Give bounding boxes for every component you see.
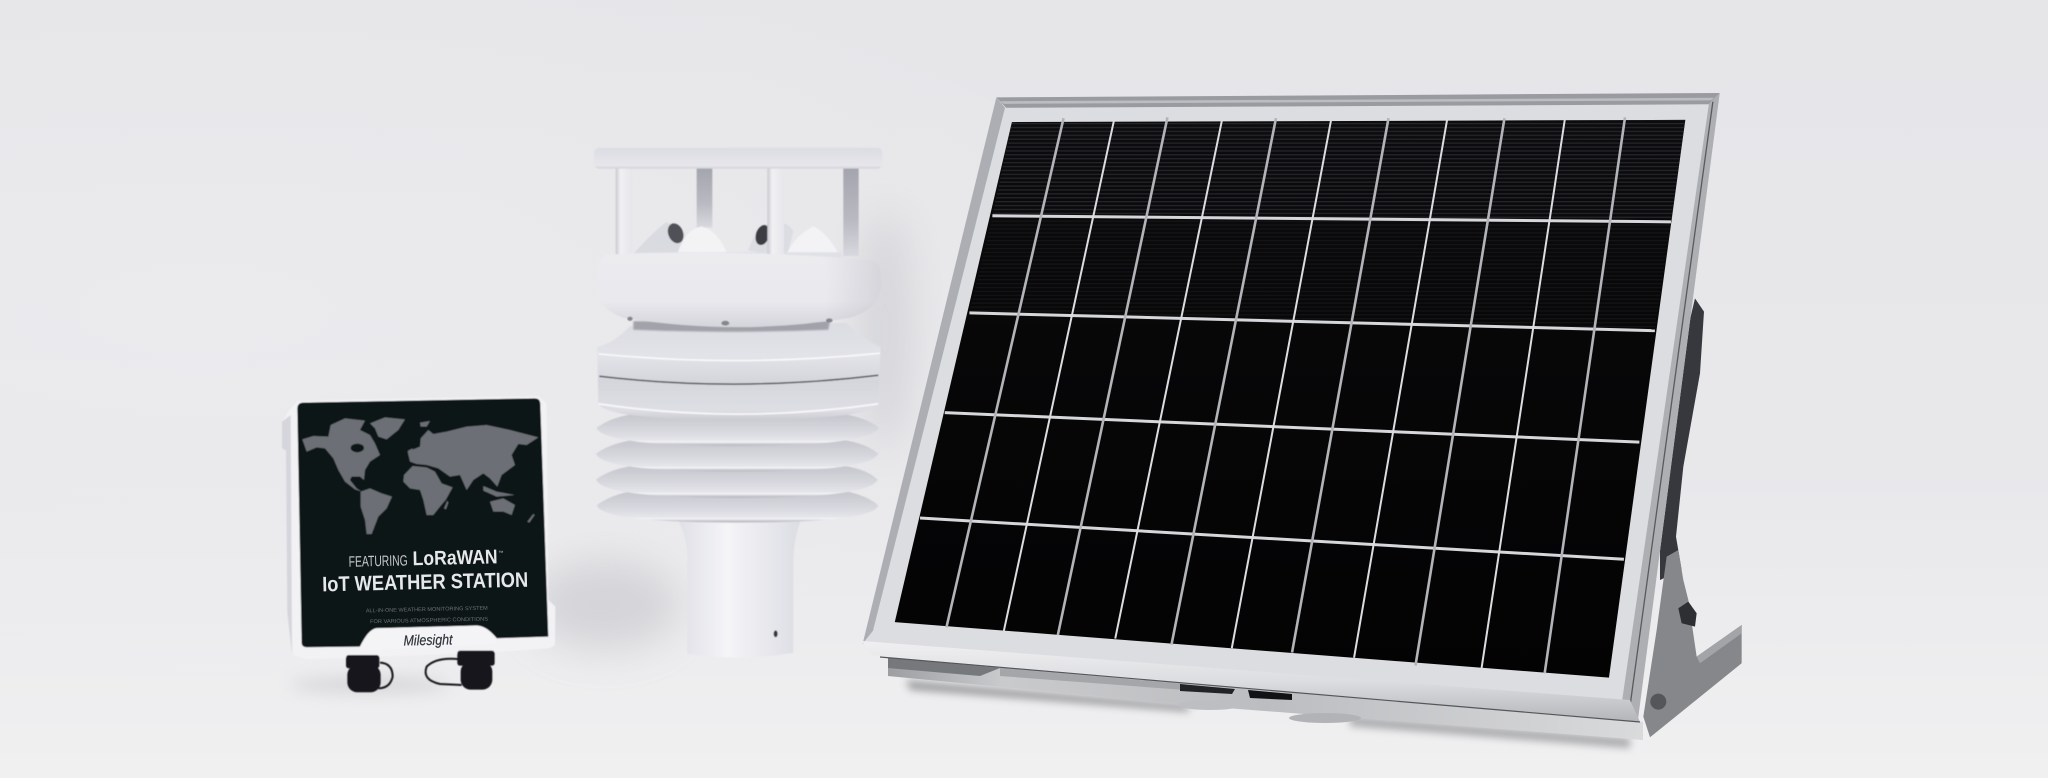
device text: ™ [498, 550, 504, 556]
device text [321, 546, 530, 651]
device left edge [282, 415, 292, 653]
busbars vertical grey [946, 117, 1625, 673]
shield neck shadow [633, 321, 830, 332]
bracket knob [1678, 602, 1697, 627]
hudson bay [351, 444, 364, 452]
product title: IoT WEATHER STATION [322, 569, 528, 596]
connector cap loops [378, 659, 462, 688]
stem hole [774, 630, 778, 637]
cell hatch [992, 120, 1685, 222]
tagline line 1: ALL-IN-ONE WEATHER MONITORING SYSTEM [366, 606, 488, 614]
solar panel assembly [862, 93, 1742, 740]
frame bottom shadow line [880, 657, 1640, 722]
ultrasonic weather sensor [594, 148, 882, 658]
sensor stem [678, 521, 801, 658]
rear dark support [1660, 298, 1704, 580]
front pillars [616, 167, 784, 259]
sensor probes [633, 221, 842, 259]
photovoltaic cells [895, 120, 1685, 678]
rear pillars [697, 167, 859, 256]
connectors [346, 651, 495, 692]
busbars horizontal [920, 216, 1671, 559]
device text: LoRaWAN [412, 546, 498, 570]
metal bracket plate [1643, 550, 1742, 737]
world map [302, 417, 538, 534]
busbars vertical white [1004, 120, 1565, 669]
device screen [297, 398, 548, 647]
second row hatch [969, 216, 1671, 331]
panel frame [863, 93, 1720, 722]
frame right edge [1622, 93, 1720, 722]
LoRaWAN heading: FEATURING [348, 552, 408, 571]
bottom rail [888, 658, 1643, 740]
radiation shield fins [596, 323, 881, 523]
logo: Milesight [403, 632, 453, 650]
logo tab [360, 626, 497, 651]
frame top edge [996, 93, 1720, 108]
bracket bolt [1650, 694, 1666, 710]
tagline line 2: FOR VARIOUS ATMOSPHERIC CONDITIONS [370, 617, 489, 625]
rear and side brackets [1643, 298, 1742, 737]
ring screws [627, 317, 833, 326]
frame bottom band [862, 641, 1640, 722]
weather station device [282, 396, 555, 692]
ring right shading [596, 253, 882, 327]
top cap [594, 148, 882, 169]
device housing [282, 396, 555, 659]
frame left edge [863, 97, 1005, 644]
sensor body ring [596, 253, 882, 327]
cast shadows [290, 210, 1630, 748]
